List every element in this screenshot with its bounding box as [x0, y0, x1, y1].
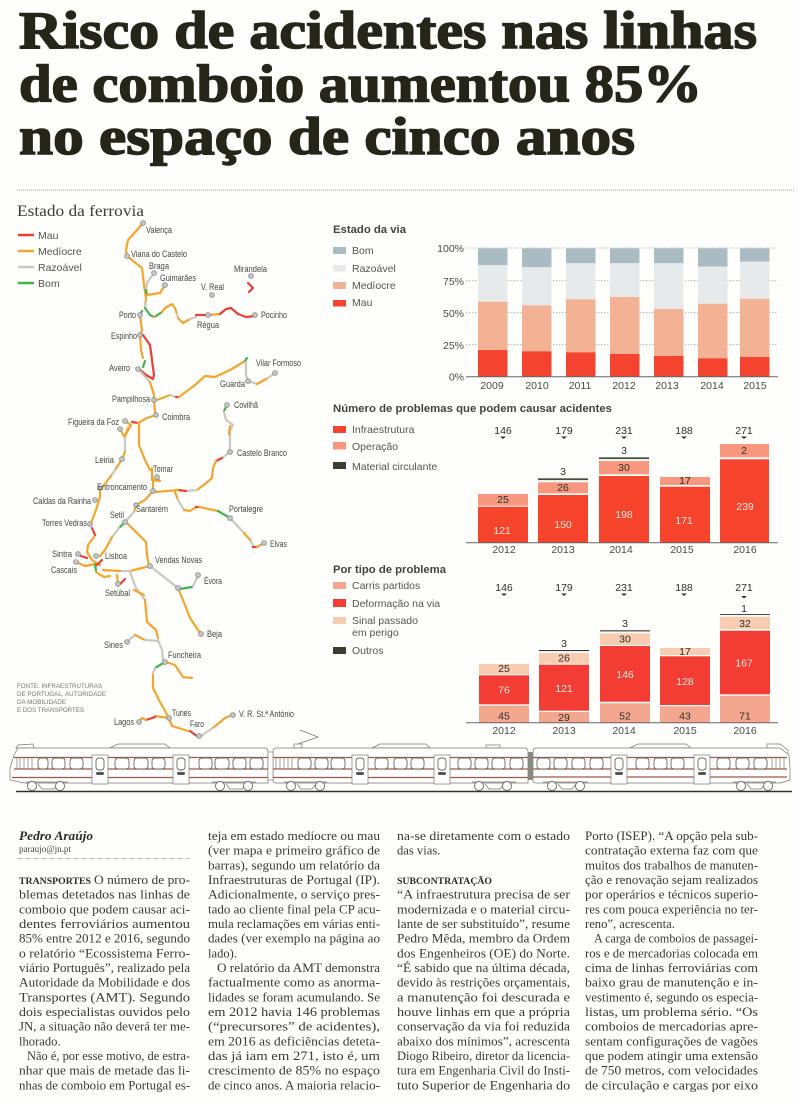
article column 3 [397, 829, 571, 1092]
stacked bars: problem types: 26 [558, 652, 570, 664]
stacked bars: problem types: 30 [619, 634, 631, 646]
totals with arrows: problem types [495, 582, 753, 598]
article column 2: (“precursores” de acidentes), [208, 1020, 380, 1034]
article column 1: viário Português”, realizado pela [19, 961, 190, 975]
article column 3: a manutenção foi descurada e [397, 990, 570, 1004]
station labels: Vilar Formoso [256, 358, 301, 368]
x axis years: 2013 [552, 725, 576, 737]
article column 1: Transportes (AMT). Segundo [19, 990, 190, 1004]
legend: problem types: Carris partidos [352, 580, 420, 592]
byline: paraujo@jn.pt [19, 845, 71, 855]
x axis years: 2013 [551, 544, 575, 556]
totals with arrows: causes: 271 [735, 425, 753, 437]
article column 2: teja em estado medíocre ou mau [208, 829, 381, 843]
x axis years: 2015 [670, 544, 694, 556]
x axis years: 2012 [492, 725, 516, 737]
legend: causes: Operação [352, 441, 398, 453]
stacked bars: causes: 3 [560, 466, 566, 478]
station labels: Portalegre [229, 504, 263, 514]
map legend: Mau [38, 230, 59, 242]
article column 4 [585, 829, 758, 1092]
article column 1 [19, 873, 191, 1092]
legend: estado da via: Razoável [352, 263, 396, 275]
article column 1: dentes ferroviários aumentou [19, 917, 191, 931]
article column 2: Infraestruturas de Portugal (IP). [208, 873, 380, 887]
article column 1: TRANSPORTES [19, 877, 91, 887]
station labels: Funcheira [168, 650, 201, 660]
totals with arrows: problem types: 188 [675, 582, 693, 594]
station labels: Castelo Branco [237, 448, 287, 458]
rail lines [76, 223, 275, 736]
article column 2: lidades se foram acumulando. Se [208, 990, 380, 1004]
article column 4: baixo grau de manutenção e in- [585, 976, 758, 990]
article column 4: por operários e técnicos superio- [585, 888, 758, 902]
article column 3: dos Engenheiros (OE) do Norte. [397, 946, 570, 960]
panel: estado da via chart [333, 224, 778, 392]
x axis years: 2015 [743, 380, 767, 392]
article column 4: contratação externa faz com que [585, 844, 758, 858]
article column 3: na-se diretamente com o estado [397, 829, 570, 843]
station labels: Évora [204, 576, 222, 586]
article column 3: tura em Engenharia Civil do Insti- [397, 1064, 570, 1078]
article column 2: em 2016 as deficiências deteta- [208, 1034, 380, 1048]
x axis years: 2014 [609, 544, 633, 556]
y axis labels [437, 243, 464, 384]
article column 2 [208, 829, 381, 1092]
map legend: Bom [38, 278, 60, 290]
article column 4: que podem atingir uma extensão [585, 1049, 758, 1063]
stacked bars: problem types: 3 [622, 618, 628, 630]
map legend: Medíocre [38, 246, 82, 258]
stacked bars: causes: 25 [497, 494, 509, 506]
article column 4: comboios de mercadorias apre- [585, 1020, 758, 1034]
x axis years [480, 380, 767, 392]
source note: DA MOBILIDADE [17, 699, 66, 706]
station labels: V. R. St.ª António [239, 709, 294, 719]
stacked bars: problem types: 146 [616, 669, 634, 681]
article column 2: (ver mapa e primeiro gráfico de [208, 844, 380, 858]
title: Risco de acidentes nas linhas [19, 2, 757, 60]
totals with arrows: causes [494, 425, 753, 439]
article column 2: tado ao cliente final pela CP acu- [208, 902, 380, 916]
source note: FONTE: INFRAESTRUTURAS [17, 683, 102, 690]
map legend [18, 230, 82, 290]
legend: problem types: Outros [352, 645, 384, 657]
article column 3: SUBCONTRATAÇÃO [397, 875, 492, 887]
bogies and wheels [26, 782, 776, 790]
y axis labels: 75% [443, 276, 464, 288]
stacked bars: causes: 239 [736, 501, 754, 513]
x axis years: 2011 [569, 380, 591, 392]
station labels: Guimarães [160, 273, 196, 283]
article column 3: lante de ser substituído”, resume [397, 917, 570, 931]
stacked bars: problem types: 1 [741, 603, 747, 615]
station labels: Santarém [136, 504, 168, 514]
station labels: Cascais [51, 565, 77, 575]
stacked bars: problem types: 32 [739, 618, 751, 630]
article column 4: listas, um problema sério. “Os [585, 1005, 758, 1019]
y axis labels: 0% [449, 372, 464, 384]
totals with arrows: causes: 188 [675, 425, 693, 437]
heading: número de problemas: Número de problemas que podem causar acidentes [333, 403, 612, 415]
x axis years: 2010 [525, 380, 549, 392]
station labels: Tomar [153, 464, 173, 474]
legend: problem types: em perigo [352, 627, 399, 639]
article column 2: dades (ver exemplo na página ao [208, 932, 380, 946]
station labels: Espinho [111, 331, 137, 341]
x axis years [492, 544, 757, 556]
article column 3: modernizada e o material circu- [397, 902, 570, 916]
article column 2: de cinco anos. A maioria relacio- [208, 1078, 380, 1092]
stacked bars: problem types: 167 [735, 658, 753, 670]
stacked bars: problem types: 3 [561, 638, 567, 650]
station labels: Covilhã [234, 400, 258, 410]
article column 4: sentam configurações de vagões [585, 1034, 758, 1048]
title: de comboio aumentou 85% [19, 56, 702, 114]
article column 4: muitos dos trabalhos de manuten- [585, 858, 758, 872]
article column 3: devido às restrições orçamentais, [397, 976, 570, 990]
article column 1: lhorado. [19, 1034, 61, 1048]
article column 4: de circulação e cargas por eixo [585, 1078, 758, 1092]
doors [92, 755, 710, 784]
legend: estado da via [333, 245, 396, 309]
article column 3: conservação da via foi reduzida [397, 1020, 570, 1034]
stripes [12, 758, 787, 778]
article column 4: A carga de comboios de passagei- [594, 932, 758, 946]
legend: problem types: Deformação na via [352, 598, 440, 610]
article column 4: de 750 metros, com velocidades [585, 1064, 758, 1078]
stacked bars: causes: 198 [615, 509, 633, 521]
heading: estado da via: Estado da via [333, 224, 407, 236]
article column 2: barras), segundo um relatório da [208, 858, 380, 872]
x axis years: 2016 [733, 725, 757, 737]
article column 1: blemas detetados nas linhas de [19, 888, 190, 902]
article column 1: Autoridade da Mobilidade e dos [19, 976, 190, 990]
article column 4: vestimento é, segundo os especia- [585, 990, 758, 1004]
station labels [33, 225, 301, 729]
legend: causes: Material circulante [352, 461, 437, 473]
title [19, 2, 757, 166]
article column 4: cima de linhas ferroviárias com [585, 961, 758, 975]
legend: estado da via: Medíocre [352, 280, 396, 292]
station labels: Pocinho [261, 310, 287, 320]
article column 2: factualmente como as anorma- [208, 976, 380, 990]
station labels: Pampilhosa [112, 394, 150, 404]
x axis years: 2009 [480, 380, 504, 392]
stacked bars: causes: 30 [618, 462, 630, 474]
station labels: Entroncamento [97, 482, 147, 492]
station labels: Coimbra [162, 412, 190, 422]
article column 2: crescimento de 85% no espaço [208, 1064, 380, 1078]
panel: map of rail network [17, 203, 301, 738]
byline [19, 828, 94, 855]
byline: Pedro Araújo [19, 828, 94, 843]
stacked bars: causes: 171 [675, 515, 693, 527]
stacked bars: problem types: 71 [739, 710, 751, 722]
article column 1: Não é, por esse motivo, de estra- [27, 1049, 190, 1063]
stacked bars: problem types: 76 [498, 684, 510, 696]
x axis years: 2012 [612, 380, 636, 392]
legend: problem types: Sinal passado [352, 615, 418, 627]
article column 3: houve linhas em que a própria [397, 1005, 570, 1019]
source note: DE PORTUGAL, AUTORIDADE [17, 691, 106, 698]
totals with arrows: causes: 231 [615, 425, 633, 437]
stacked bars: problem types: 25 [498, 663, 510, 675]
stacked bars: causes: 150 [554, 519, 572, 531]
x axis years: 2016 [733, 544, 757, 556]
article column 1: nhas de comboio em Portugal es- [19, 1078, 190, 1092]
stacked bars: causes: 26 [557, 482, 569, 494]
station labels: Beja [207, 629, 222, 639]
totals with arrows: problem types: 231 [615, 582, 633, 594]
map legend: Razoável [38, 262, 82, 274]
stacked bars: problem types [466, 603, 778, 724]
legend: estado da via: Bom [352, 245, 374, 257]
source note [17, 683, 106, 714]
legend: estado da via: Mau [352, 297, 373, 309]
stacked bars: causes: 121 [493, 525, 511, 537]
station labels: Guarda [220, 379, 245, 389]
station labels: Lagos [114, 717, 134, 727]
illustration: train [10, 730, 792, 792]
article column 2: O relatório da AMT demonstra [217, 961, 380, 975]
article column 2: Adicionalmente, o serviço pres- [208, 888, 380, 902]
article column 4: ros e de mercadorias colocada em [585, 946, 758, 960]
article column 3: Pedro Mêda, membro da Ordem [397, 932, 570, 946]
panel: por tipo de problema chart [333, 564, 778, 737]
article column 3: Diogo Ribeiro, diretor da licencia- [397, 1049, 570, 1063]
heading: por tipo de problema: Por tipo de problema [333, 564, 447, 576]
article column 1: JN, a situação não deverá ter me- [19, 1020, 190, 1034]
x axis years: 2012 [492, 544, 516, 556]
stacked bars: problem types: 128 [676, 676, 694, 688]
map heading: Estado da ferrovia [17, 203, 144, 220]
legend: causes: Infraestrutura [352, 424, 415, 436]
stacked bars: causes: 17 [679, 475, 691, 487]
station labels: Faro [190, 719, 204, 729]
roof units and pantograph [16, 744, 34, 748]
x axis years: 2015 [673, 725, 697, 737]
title: no espaço de cinco anos [19, 108, 635, 166]
station labels: Aveiro [109, 363, 130, 373]
stacked bars: problem types: 121 [555, 683, 573, 695]
stacked bars: causes: 2 [741, 445, 747, 457]
article column 4: res com pouca experiência no ter- [585, 902, 758, 916]
totals with arrows: problem types: 146 [495, 582, 513, 594]
station labels: Lisboa [105, 551, 127, 561]
x axis years: 2013 [655, 380, 679, 392]
rail [16, 790, 792, 792]
station labels: Porto [119, 310, 136, 320]
article column 2: mula reclamações em várias enti- [208, 917, 380, 931]
station labels: Mirandela [234, 264, 267, 274]
station labels: Sintra [52, 549, 72, 559]
article column 1: comboio que podem causar aci- [19, 902, 190, 916]
panel: número de problemas chart [333, 403, 778, 556]
x axis years [492, 725, 757, 737]
y axis labels: 25% [443, 340, 464, 352]
station labels: Setúbal [105, 588, 130, 598]
article column 2: lado). [208, 946, 237, 960]
article column 3: abaixo dos mínimos”, acrescenta [397, 1034, 570, 1048]
stacked bars: problem types: 29 [558, 712, 570, 724]
x axis years: 2014 [700, 380, 724, 392]
station labels: Setil [110, 510, 124, 520]
car bodies [10, 748, 268, 783]
stacked bars: problem types: 52 [619, 710, 631, 722]
article column 4: ção e renovação sejam realizados [585, 873, 758, 887]
station labels: Régua [197, 320, 219, 330]
article column 1: o relatório “Ecossistema Ferro- [19, 946, 190, 960]
y axis labels: 50% [443, 308, 464, 320]
stacked bars: problem types: 43 [679, 710, 691, 722]
stacked bars: causes: 3 [621, 445, 627, 457]
y axis labels: 100% [437, 243, 464, 255]
source note: E DOS TRANSPORTES [17, 707, 84, 714]
station labels: V. Real [201, 282, 224, 292]
station labels: Vendas Novas [155, 555, 202, 565]
article column 1: nhar que mais de metade das li- [19, 1064, 190, 1078]
article column 1: 85% entre 2012 e 2016, segundo [19, 932, 190, 946]
legend: problem types [333, 580, 440, 657]
station labels: Caldas da Rainha [33, 496, 91, 506]
station labels: Figueira da Foz [68, 417, 119, 427]
article column 3: “É sabido que na última década, [397, 961, 570, 975]
stacked bars: problem types: 17 [679, 646, 691, 658]
legend: causes [333, 424, 437, 473]
stacked bars [466, 248, 778, 377]
stacked bars: causes [466, 444, 778, 543]
station labels: Viana do Castelo [131, 249, 187, 259]
article column 2: em 2012 havia 146 problemas [208, 1005, 380, 1019]
article column 4: Porto (ISEP). “A opção pela sub- [585, 829, 758, 843]
x axis years: 2014 [612, 725, 636, 737]
totals with arrows: problem types: 271 [735, 582, 753, 594]
stacked bars: problem types: 45 [498, 710, 510, 722]
article column 1: O número de pro- [94, 873, 190, 887]
article column 3: das vias. [397, 844, 440, 858]
windows [17, 758, 784, 769]
station labels: Valença [146, 225, 172, 235]
article column 2: das já iam em 271, isto é, um [208, 1049, 380, 1063]
station labels: Elvas [270, 539, 287, 549]
station labels: Tunes [172, 708, 191, 718]
totals with arrows: causes: 179 [555, 425, 573, 437]
station nodes [74, 221, 277, 738]
station labels: Braga [149, 261, 169, 271]
article column 3: tuto Superior de Engenharia do [397, 1078, 570, 1092]
article column 3: “A infraestrutura precisa de ser [397, 888, 571, 902]
station labels: Leiria [95, 455, 114, 465]
station labels: Torres Vedras [42, 518, 87, 528]
totals with arrows: causes: 146 [494, 425, 512, 437]
totals with arrows: problem types: 179 [555, 582, 573, 594]
station labels: Sines [104, 640, 123, 650]
article column 4: reno”, acrescenta. [585, 917, 675, 931]
article column 1: dois especialistas ouvidos pelo [19, 1005, 190, 1019]
